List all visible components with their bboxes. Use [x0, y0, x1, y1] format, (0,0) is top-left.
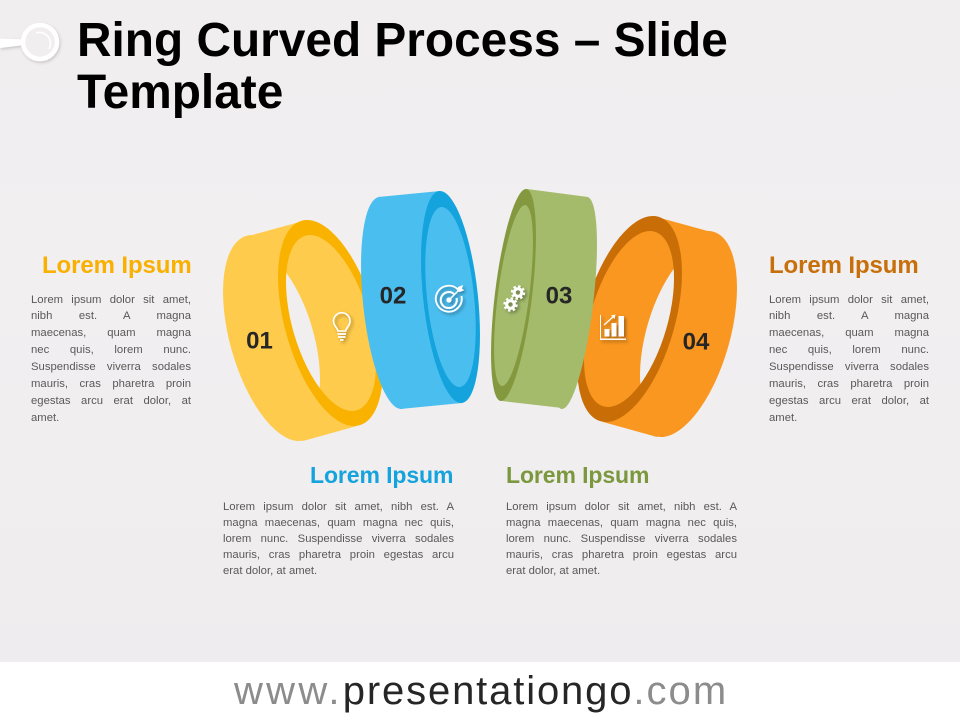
text block: blue — [223, 501, 454, 577]
icon: gears — [504, 286, 524, 310]
number 03: 03 — [546, 282, 572, 310]
heading: orange: Lorem Ipsum — [769, 252, 919, 279]
text block: orange: nibh est. A magna — [769, 310, 929, 322]
text block: yellow: nec quis, lorem nunc. — [31, 344, 191, 356]
title: Template — [77, 66, 283, 119]
text block: green — [506, 501, 737, 577]
text block: orange: amet. — [769, 412, 797, 424]
icon: target — [436, 285, 464, 312]
text block: blue: lorem nunc. Suspendisse viverra sodales — [223, 533, 454, 545]
footer url: www.presentationgo.com — [234, 669, 728, 713]
text block: yellow — [31, 294, 192, 424]
text block: yellow: Lorem ipsum dolor sit amet, — [31, 294, 191, 306]
text block: green: magna maecenas, quam magna nec quis, — [506, 517, 737, 529]
text block: blue: erat dolor, at amet. — [223, 565, 317, 577]
icon: header ring marker — [0, 25, 57, 59]
ring 04 — [578, 216, 737, 437]
text block: orange — [769, 294, 930, 424]
icon: light bulb — [334, 313, 350, 340]
text block: blue: magna maecenas, quam magna nec quis, — [223, 517, 454, 529]
number 01: 01 — [246, 328, 273, 354]
footer band — [0, 662, 960, 720]
ring 02 — [352, 188, 489, 412]
text block: yellow: mauris, cras pharetra proin — [31, 378, 191, 390]
text block: orange: Lorem ipsum dolor sit amet, — [769, 294, 929, 306]
text block: orange: nec quis, lorem nunc. — [769, 344, 929, 356]
text block: green: Lorem ipsum dolor sit amet, nibh est. A — [506, 501, 737, 513]
heading: green: Lorem Ipsum — [506, 462, 649, 488]
text block: green: lorem nunc. Suspendisse viverra sodales — [506, 533, 737, 545]
title: Ring Curved Process – Slide — [77, 14, 728, 67]
text block: green: erat dolor, at amet. — [506, 565, 600, 577]
ring 03 — [482, 187, 606, 411]
text block: blue: Lorem ipsum dolor sit amet, nibh est. A — [223, 501, 454, 513]
text block: blue: mauris, cras pharetra proin egestas arcu — [223, 549, 454, 561]
text block: yellow: maecenas, quam magna — [31, 327, 191, 339]
text block: green: mauris, cras pharetra proin egestas arcu — [506, 549, 737, 561]
heading: yellow: Lorem Ipsum — [42, 252, 192, 279]
heading: blue: Lorem Ipsum — [310, 462, 453, 488]
text block: orange: egestas arcu erat dolor, at — [769, 395, 929, 407]
text block: orange: mauris, cras pharetra proin — [769, 378, 929, 390]
icon: bar chart — [600, 314, 626, 340]
number 02: 02 — [380, 282, 406, 310]
number 04: 04 — [683, 328, 710, 356]
text block: yellow: amet. — [31, 412, 59, 424]
text block: orange: maecenas, quam magna — [769, 327, 929, 339]
text block: orange: Suspendisse viverra sodales — [769, 361, 929, 373]
text block: yellow: nibh est. A magna — [31, 310, 191, 322]
ring 01 — [223, 220, 382, 441]
text block: yellow: egestas arcu erat dolor, at — [31, 395, 191, 407]
title — [77, 14, 728, 119]
text block: yellow: Suspendisse viverra sodales — [31, 361, 191, 373]
